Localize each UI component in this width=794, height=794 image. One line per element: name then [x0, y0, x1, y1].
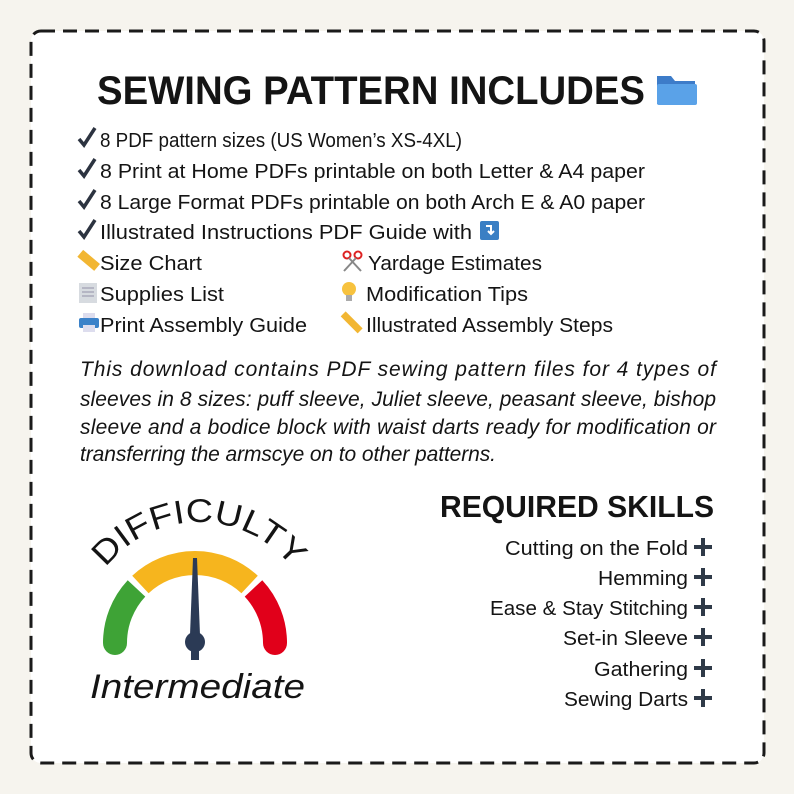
- icon: scissors + yardage: Yardage Estimates: [368, 253, 542, 275]
- description paragraph: [80, 358, 718, 466]
- feature grid: [77, 250, 613, 337]
- checklist: [79, 128, 645, 244]
- gauge arcs: [115, 563, 275, 643]
- required skills heading: REQUIRED SKILLS: [440, 489, 714, 524]
- description paragraph: transferring the armscye on to other patterns.: [80, 443, 496, 466]
- icon: document + supplies: Supplies List: [100, 284, 224, 306]
- needle: [190, 558, 200, 635]
- icon: ruler + size chart: [77, 250, 202, 275]
- skills list: Cutting on the Fold: [505, 538, 688, 560]
- skills list: Ease & Stay Stitching: [490, 598, 688, 620]
- icon: bulb + tips: Modification Tips: [366, 284, 528, 306]
- icon: printer + assembly guide: Print Assembly Guide: [100, 315, 307, 337]
- item 2: 8 Print at Home PDFs printable on both Letter & A4 paper: [100, 161, 645, 183]
- skills list: Gathering: [594, 659, 688, 681]
- item 1: 8 PDF pattern sizes (US Women’s XS-4XL): [100, 130, 462, 152]
- description paragraph: sleeve and a bodice block with waist darts ready for modification or: [80, 416, 717, 439]
- gauge label: DIFFICULTY: DIFFICULTY: [91, 499, 308, 565]
- difficulty gauge: [90, 499, 308, 706]
- gauge level: Intermediate: Intermediate: [90, 668, 305, 706]
- icon: ruler + size chart: Size Chart: [100, 253, 202, 275]
- skills list: Sewing Darts: [564, 689, 688, 711]
- item 4: Illustrated Instructions PDF Guide with: [100, 222, 472, 244]
- skills list: Set-in Sleeve: [563, 628, 688, 650]
- icon: folder: [657, 76, 697, 105]
- skills list: Hemming: [598, 568, 688, 590]
- description paragraph: sleeves in 8 sizes: puff sleeve, Juliet sleeve, peasant sleeve, bishop: [80, 388, 716, 411]
- description paragraph: This download contains PDF sewing pattern files for 4 types of: [80, 358, 718, 381]
- title: SEWING PATTERN INCLUDES: [97, 69, 645, 113]
- icon: pencil + steps: Illustrated Assembly Steps: [366, 315, 613, 337]
- item 3: 8 Large Format PDFs printable on both Arch E & A0 paper: [100, 192, 645, 214]
- skills list: [490, 538, 712, 711]
